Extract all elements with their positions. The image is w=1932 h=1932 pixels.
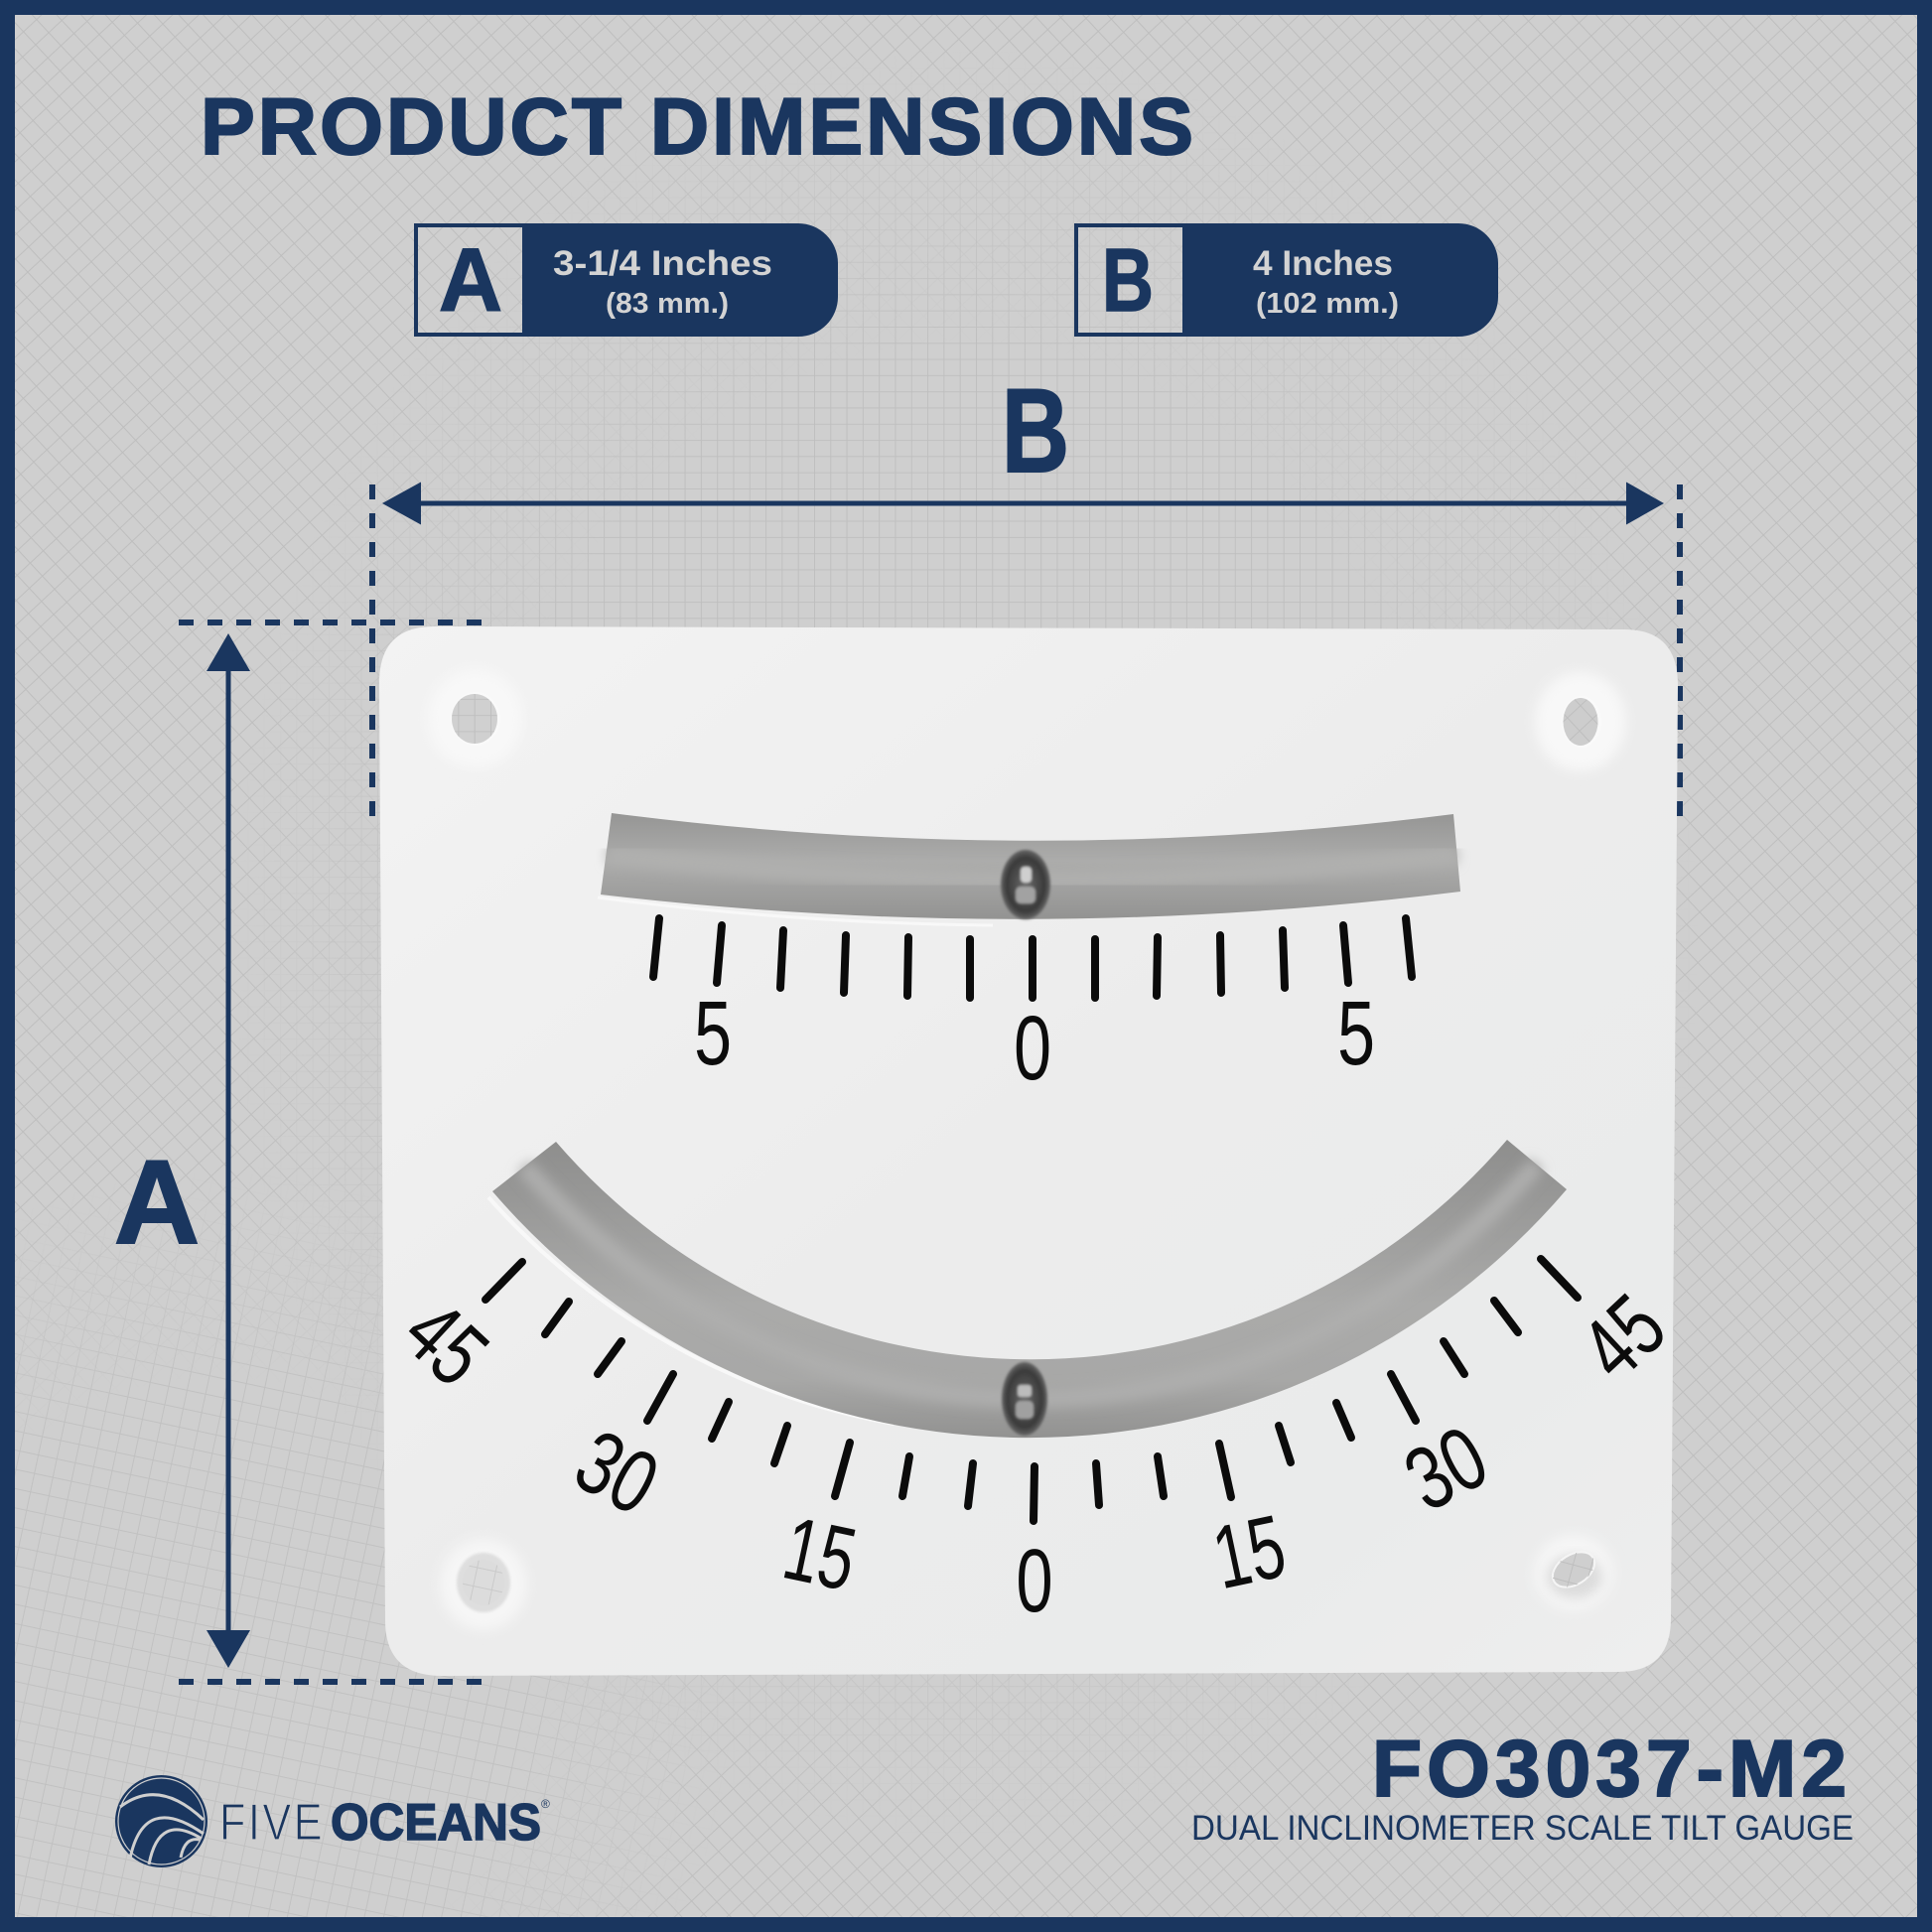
badge: dimension B: B — [1102, 231, 1154, 331]
product name: DUAL INCLINOMETER SCALE TILT GAUGE — [1191, 1809, 1854, 1848]
product model number: FO3037-M2 — [1372, 1725, 1852, 1814]
badge: dimension A — [414, 223, 838, 337]
badge: dimension B: (102 mm.) — [1256, 288, 1399, 320]
brand logo — [115, 1775, 550, 1867]
large arc window — [488, 1140, 1567, 1438]
badge: dimension A: (83 mm.) — [606, 288, 729, 320]
badge: dimension A: 3-1/4 Inches — [553, 244, 772, 283]
badge: dimension B: 4 Inches — [1253, 244, 1393, 283]
arrow: height A — [207, 633, 250, 1668]
large scale numbers: 30 — [560, 1411, 674, 1534]
mounting hole: bottom right — [1534, 1535, 1613, 1610]
large scale numbers: 45 — [1562, 1275, 1684, 1399]
badge: dimension B — [1074, 223, 1498, 337]
large scale ticks — [485, 1259, 1578, 1521]
small scale numbers: 0 — [1014, 998, 1051, 1099]
wordmark — [219, 1794, 550, 1852]
mounting hole: top right — [1535, 672, 1626, 771]
large scale numbers: 0 — [1016, 1530, 1053, 1630]
mounting hole: top left — [428, 669, 523, 768]
large scale numbers: 45 — [385, 1281, 507, 1405]
wordmark: ® — [541, 1797, 550, 1811]
icon: wave globe — [115, 1775, 207, 1867]
small scale numbers — [694, 983, 1375, 1099]
small scale ticks — [653, 918, 1412, 998]
ball: large level — [1002, 1362, 1047, 1436]
dashed guides — [179, 484, 1680, 1682]
arrow: width B — [382, 483, 1664, 524]
large scale numbers: 15 — [775, 1499, 864, 1610]
wordmark: FIVE — [219, 1794, 325, 1852]
ball: small level — [1001, 850, 1050, 919]
gauge plate — [379, 626, 1684, 1676]
small scale numbers: 5 — [1337, 983, 1375, 1084]
large scale numbers: 15 — [1205, 1497, 1294, 1608]
large scale numbers — [385, 1275, 1684, 1630]
mounting hole: bottom left — [440, 1539, 527, 1630]
large scale numbers: 30 — [1389, 1407, 1503, 1530]
big letter A: A — [114, 1136, 200, 1269]
title: PRODUCT DIMENSIONS — [201, 82, 1196, 172]
wordmark: OCEANS — [331, 1794, 541, 1852]
small level window — [598, 813, 1460, 925]
small scale numbers: 5 — [694, 983, 732, 1084]
big letter B: B — [1002, 364, 1069, 497]
badge: dimension A: A — [439, 231, 502, 331]
